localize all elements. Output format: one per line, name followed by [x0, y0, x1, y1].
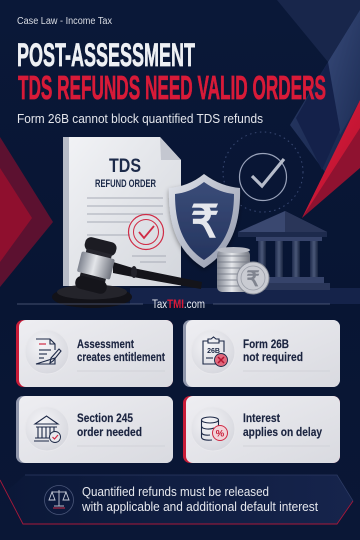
category label: Case Law - Income Tax	[17, 16, 112, 27]
clipboard label: 26B	[207, 348, 220, 355]
document subheading: REFUND ORDER	[95, 178, 156, 190]
card text: Form 26B	[243, 337, 289, 351]
card text: not required	[243, 350, 303, 364]
callout text: Quantified refunds must be released	[82, 485, 269, 499]
percent sign: %	[216, 428, 225, 440]
illustration: judge gavel	[52, 236, 202, 308]
rupee symbol: ₹	[191, 196, 219, 247]
callout text: with applicable and additional default interest	[81, 500, 318, 514]
icon: scales of justice	[44, 486, 74, 514]
card text: Interest	[243, 411, 280, 425]
card text: applies on delay	[243, 425, 322, 439]
callout banner	[0, 475, 353, 524]
card: assessment creates entitlement	[16, 320, 173, 387]
card: interest applies on delay	[183, 396, 340, 463]
card text: order needed	[77, 425, 142, 439]
background: right red shard	[302, 100, 360, 218]
illustration: bank building	[238, 211, 330, 290]
icon: database with percent	[191, 407, 235, 451]
red approval stamp	[128, 214, 164, 250]
subtitle: Form 26B cannot block quantified TDS refunds	[17, 112, 263, 126]
illustration: coin stack and rupee coin: ₹	[246, 268, 260, 291]
illustration: rupee shield	[169, 174, 240, 268]
title: POST-ASSESSMENT	[17, 37, 195, 73]
background: top-right diagonal shapes	[277, 0, 360, 172]
card text: Section 245	[77, 411, 133, 425]
background: lower illustration floor band	[130, 288, 360, 304]
card text: Assessment	[77, 337, 134, 351]
document heading: TDS	[109, 156, 141, 177]
brand: TaxTMI.com: TaxTMI.com	[152, 299, 205, 311]
icon: document with pen	[25, 330, 69, 374]
icon: bank with check badge	[25, 407, 69, 451]
illustration: coin stack and rupee coin	[217, 247, 269, 294]
icon: clipboard with cross	[191, 330, 235, 374]
background: left red chevron	[0, 137, 53, 287]
title	[17, 37, 326, 106]
card: section 245 order needed	[16, 396, 173, 463]
card text: creates entitlement	[77, 350, 165, 364]
icon: check circle with dotted ring	[223, 132, 303, 212]
card: form 26B not required	[183, 320, 340, 387]
illustration: TDS refund order document	[63, 137, 181, 286]
document text lines	[87, 198, 166, 262]
